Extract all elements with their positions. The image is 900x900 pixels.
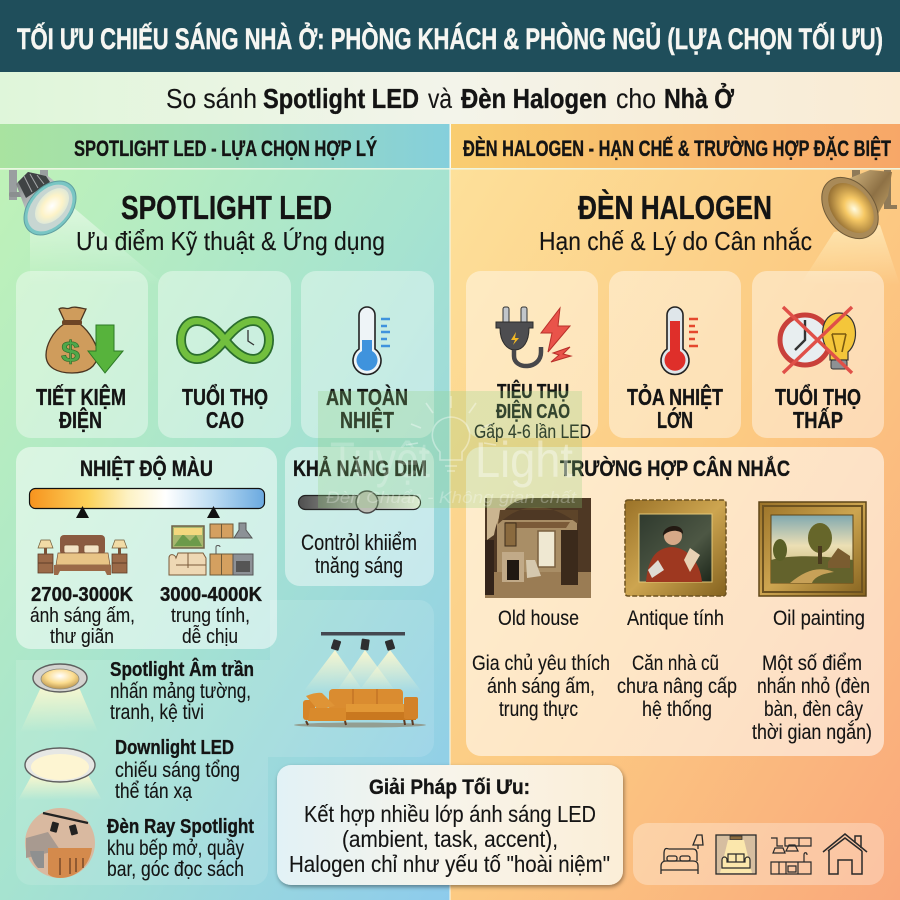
image: antique portrait (625, 500, 726, 596)
item: Đèn Ray Spotlight: bar, góc đọc sách (107, 858, 244, 881)
background: right halogen panel (450, 168, 900, 900)
card: Tuổi thọ cao: TUỔI THỌ (182, 383, 268, 410)
heading: Đèn Halogen: Hạn chế & Lý do Cân nhắc (539, 226, 812, 256)
item: Spotlight Âm trần (20, 657, 254, 732)
icon: bedroom (38, 535, 127, 575)
callout: giải pháp tối ưu (277, 765, 623, 885)
item: Đèn Ray Spotlight: khu bếp mở, quầy (107, 837, 244, 860)
subtitle band: cho (616, 83, 656, 114)
text: column 1: Gia chủ yêu thích (472, 652, 610, 675)
panel: Khả năng dim: Contrỏl khiiểm (301, 530, 417, 555)
icon: living room with light (716, 835, 756, 874)
icon: clock and bulb crossed out (780, 307, 855, 373)
card: Tiêu thụ điện cao: ĐIỆN CAO (496, 399, 570, 423)
item: Downlight LED (18, 737, 240, 803)
item: Downlight LED: Downlight LED (115, 737, 234, 759)
text: column 3: thời gian ngắn) (752, 721, 872, 744)
text: column 1: trung thực (499, 698, 578, 721)
subtitle band: Spotlight LED (263, 83, 419, 114)
panel: Trường hợp cân nhắc: TRƯỜNG HỢP CÂN NHẮC (560, 456, 790, 481)
panel: Nhiệt độ màu: NHIỆT ĐỘ MÀU (80, 456, 213, 481)
panel: Nhiệt độ màu: thư giãn (50, 626, 114, 648)
card: An toàn nhiệt: NHIỆT (340, 406, 394, 433)
text: column 3: bàn, đèn cây (764, 698, 863, 721)
panel: Trường hợp cân nhắc: Oil painting (773, 607, 865, 630)
icon: bedroom outline (661, 835, 703, 874)
color temperature bar (30, 488, 264, 518)
panel: Khả năng dim: KHẢ NĂNG DIM (293, 456, 427, 481)
icon: halogen spotlight with beam (800, 166, 900, 285)
subtitle band: và (428, 83, 452, 114)
icon: blue thermometer (353, 307, 390, 374)
panel: Nhiệt độ màu (16, 447, 277, 649)
heading: Spotlight LED (76, 189, 385, 256)
icon: plug with lightning (496, 307, 571, 366)
icon: house outline (823, 834, 867, 874)
subtitle band (0, 72, 900, 124)
icon: infinity with clock (181, 321, 269, 359)
card: Tiết kiệm điện: TIẾT KIỆM (36, 383, 126, 410)
card: Tỏa nhiệt lớn: LỚN (657, 406, 693, 433)
card: An toàn nhiệt: AN TOÀN (326, 383, 408, 410)
panel: Nhiệt độ màu: 2700-3000K (31, 583, 133, 606)
icon: living room and kitchen (169, 523, 253, 575)
image: oil painting (759, 502, 866, 596)
panel: Nhiệt độ màu: 3000-4000K (160, 583, 262, 606)
text: column 3 (752, 652, 872, 744)
card: Tỏa nhiệt lớn (609, 271, 741, 438)
background: left LED panel (0, 168, 450, 900)
panel: room icons (633, 823, 884, 885)
title banner (0, 0, 900, 72)
card: Tỏa nhiệt lớn: TỎA NHIỆT (627, 382, 723, 410)
section header: LED (0, 124, 450, 168)
panel: Trường hợp cân nhắc: Antique tính (627, 607, 724, 630)
panel: Khả năng dim (285, 447, 434, 586)
heading: Đèn Halogen: ĐÈN HALOGEN (578, 189, 772, 226)
card: Tiêu thụ điện cao: Gấp 4-6 lần LED (474, 422, 591, 443)
panel: Trường hợp cân nhắc (466, 447, 884, 756)
callout: giải pháp tối ưu: (ambient, task, accent), (342, 826, 558, 852)
card: Tuổi thọ cao (158, 271, 291, 438)
illustration: track light over sofa (294, 632, 426, 728)
icon: money bag and down arrow: $ (61, 336, 80, 369)
text: column 2 (617, 652, 737, 721)
section header: LED: SPOTLIGHT LED - LỰA CHỌN HỢP LÝ (74, 136, 377, 161)
item: Spotlight Âm trần: nhấn mảng tường, (110, 680, 251, 703)
panel: Trường hợp cân nhắc: Old house (498, 607, 579, 630)
heading: Đèn Halogen (539, 189, 812, 256)
card: Tuổi thọ thấp (752, 271, 884, 438)
callout: giải pháp tối ưu: Giải Pháp Tối Ưu: (369, 776, 530, 799)
text: column 1: ánh sáng ấm, (487, 675, 595, 698)
card: Tuổi thọ cao: CAO (206, 407, 244, 433)
item: Downlight LED: chiếu sáng tổng (115, 759, 240, 782)
text: column 2: Căn nhà cũ (632, 652, 719, 675)
item: Đèn Ray Spotlight (25, 808, 254, 881)
icon: red thermometer (661, 307, 698, 374)
card: Tiết kiệm điện: ĐIỆN (59, 406, 102, 433)
panel: Khả năng dim: tnăng sáng (315, 553, 403, 578)
panel: LED fixture types (16, 600, 434, 885)
text: column 3: nhấn nhỏ (đèn (757, 675, 870, 698)
callout: giải pháp tối ưu: Halogen chỉ như yếu tố "hoài niệm" (289, 851, 610, 877)
item: Spotlight Âm trần: tranh, kệ tivi (110, 701, 204, 724)
subtitle band: Nhà Ở (664, 82, 734, 114)
panel: Nhiệt độ màu: ánh sáng ấm, (30, 605, 135, 627)
text: column 2: chưa nâng cấp (617, 675, 737, 698)
watermark: Tuyệt Light logo: Light (475, 432, 573, 488)
icon: kitchen outline (771, 838, 811, 874)
panel: Nhiệt độ màu: trung tính, (171, 605, 250, 627)
watermark: Tuyệt Light logo: Tuyệt (330, 432, 430, 488)
icon: LED spotlight with beam (9, 170, 165, 285)
text: column 2: hệ thống (642, 698, 712, 721)
card: Tiêu thụ điện cao (466, 271, 598, 443)
item: Spotlight Âm trần: Spotlight Âm trần (110, 657, 254, 681)
card: Tuổi thọ thấp: TUỔI THỌ (775, 383, 861, 410)
item: Downlight LED: thể tán xạ (115, 780, 192, 803)
item: Đèn Ray Spotlight: Đèn Ray Spotlight (107, 816, 254, 838)
watermark: Tuyệt Light logo (318, 391, 582, 508)
card: An toàn nhiệt (301, 271, 434, 438)
text: column 1 (472, 652, 610, 721)
icon: money bag and down arrow (46, 307, 123, 373)
subtitle band: So sánh (166, 83, 257, 114)
heading: Spotlight LED: Ưu điểm Kỹ thuật & Ứng dụng (76, 226, 385, 256)
section header: halogen (451, 124, 900, 168)
panel: Nhiệt độ màu: dễ chịu (182, 625, 238, 648)
text: column 3: Một số điểm (762, 652, 862, 675)
card: Tuổi thọ thấp: THẤP (793, 406, 843, 433)
callout: giải pháp tối ưu: Kết hợp nhiều lớp ánh sáng LED (304, 801, 596, 827)
card: Tiêu thụ điện cao: TIÊU THỤ (497, 379, 569, 403)
watermark: Tuyệt Light logo: Đèn Chuẩn - Không gian chất (326, 488, 577, 507)
heading: Spotlight LED: SPOTLIGHT LED (121, 189, 332, 226)
image: old house (485, 498, 591, 598)
dimmer slider (298, 491, 420, 513)
subtitle band: Đèn Halogen (461, 83, 607, 114)
card: Tiết kiệm điện (16, 271, 148, 438)
